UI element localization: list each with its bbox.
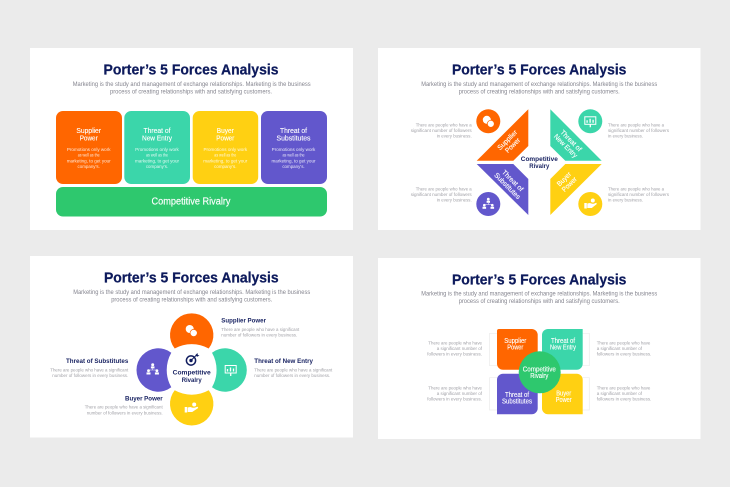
- center circle: competitive rivalry: [519, 351, 561, 393]
- card: buyer power: Promotions only work: [203, 147, 248, 152]
- card: threat of substitutes: company’s.: [282, 164, 305, 169]
- card: supplier power: Supplier: [76, 128, 102, 135]
- quadrant: threat of substitutes: Substitutes: [502, 399, 532, 406]
- title: Porter’s 5 Forces Analysis: [452, 272, 626, 288]
- subtitle: Marketing is the study and management of exchange relationships. Marketing is the business: [421, 290, 657, 297]
- quadrant: threat of substitutes: Threat of: [505, 392, 529, 399]
- center label: [173, 370, 211, 384]
- text: substitutes description: followers in every business.: [427, 397, 482, 402]
- subtitle: process of creating relationships with and satisfying customers.: [111, 296, 272, 303]
- text: supplier power description: There are people who have: [428, 340, 482, 345]
- subtitle: process of creating relationships with and satisfying customers.: [459, 298, 620, 305]
- triangle: supplier power: [477, 109, 528, 161]
- triangle: threat of new entry: Threat of: [558, 129, 582, 153]
- text: supplier power description: [427, 340, 483, 357]
- text: threat of new entry: number of followers in every business.: [254, 373, 330, 378]
- quadrant: supplier power: Supplier: [504, 338, 527, 345]
- triangle: threat of substitutes: [477, 164, 528, 215]
- icon: target: [186, 353, 200, 365]
- text: supplier power description: There are people who have a: [416, 122, 472, 128]
- text: supplier power: [221, 317, 300, 338]
- quadrant: threat of new entry: New Entry: [550, 345, 576, 352]
- card: threat of substitutes: Promotions only work: [272, 147, 316, 152]
- text: new entry description: followers in every business.: [597, 352, 651, 357]
- text: substitutes description: significant number of followers: [411, 192, 472, 197]
- card: threat of new entry: company’s.: [146, 164, 168, 169]
- panel: card layout slide: [30, 48, 353, 230]
- text: new entry description: There are people who have a: [608, 122, 664, 128]
- text: threat of new entry: There are people who have a significant: [254, 367, 333, 372]
- text: new entry description: significant number of followers: [608, 128, 670, 133]
- text: supplier power: number of followers in every business.: [221, 333, 297, 338]
- center label: Rivalry: [182, 377, 202, 384]
- text: supplier power description: a significant number of: [437, 346, 483, 351]
- title: Porter’s 5 Forces Analysis: [104, 271, 279, 287]
- card: threat of substitutes: [261, 111, 327, 184]
- center label: Competitive: [173, 370, 211, 377]
- center label: Rivalry: [529, 163, 550, 170]
- triangle: buyer power: Power: [561, 176, 579, 194]
- text: buyer description: [597, 385, 651, 402]
- text: new entry description: There are people who have: [597, 340, 651, 345]
- petal: buyer power: [170, 390, 213, 425]
- text: buyer power: [85, 395, 163, 415]
- icon: presentation board: [578, 109, 602, 133]
- card: buyer power: marketing, to get your: [203, 158, 248, 163]
- text: threat of substitutes: [50, 358, 129, 378]
- card: threat of new entry: Threat of: [144, 128, 171, 135]
- subtitle: [73, 289, 310, 303]
- triangle: threat of substitutes: Threat of: [500, 169, 524, 193]
- panel: petal layout slide: [30, 256, 353, 438]
- quadrant: buyer power: [542, 374, 583, 414]
- card: supplier power: company’s.: [78, 164, 100, 169]
- quadrant: threat of new entry: Threat of: [551, 338, 575, 345]
- text: threat of substitutes: number of followers in every business.: [52, 373, 128, 378]
- card: supplier power: marketing, to get your: [67, 158, 111, 163]
- quadrant: supplier power: Power: [507, 345, 524, 352]
- text: threat of new entry: Threat of New Entry: [254, 358, 313, 365]
- text: supplier power description: followers in every business.: [427, 352, 482, 357]
- card: buyer power: as well as the: [214, 153, 237, 158]
- icon: coins: [476, 109, 500, 133]
- card: buyer power: Power: [216, 135, 235, 142]
- text: buyer description: [608, 186, 670, 202]
- bar: competitive rivalry: [56, 187, 327, 216]
- subtitle: process of creating relationships with and satisfying customers.: [459, 89, 620, 96]
- subtitle: [421, 290, 657, 305]
- card: threat of substitutes: as well as the: [282, 153, 305, 158]
- text: buyer description: followers in every business.: [597, 397, 651, 402]
- text: new entry description: a significant number of: [597, 346, 643, 351]
- card: threat of new entry: [124, 111, 190, 184]
- petal: threat of new entry: [212, 348, 247, 392]
- text: new entry description: [608, 122, 670, 138]
- card: supplier power: as well as the: [78, 153, 100, 158]
- text: supplier power: There are people who have a significant: [221, 327, 300, 332]
- subtitle: Marketing is the study and management of exchange relationships. Marketing is the business: [73, 81, 311, 88]
- text: new entry description: in every business.: [608, 134, 643, 138]
- text: buyer description: significant number of followers: [608, 192, 670, 197]
- card: threat of substitutes: Substitutes: [276, 135, 311, 142]
- text: threat of substitutes: Threat of Substitutes: [66, 358, 129, 365]
- text: supplier power description: significant number of followers: [411, 128, 472, 133]
- text: buyer description: in every business.: [608, 198, 643, 202]
- text: threat of substitutes: There are people who have a significant: [50, 367, 129, 372]
- text: substitutes description: There are people who have: [428, 385, 482, 390]
- card: supplier power: [56, 111, 122, 184]
- text: buyer description: a significant number of: [597, 391, 643, 396]
- text: supplier power description: in every business.: [437, 134, 472, 138]
- text: buyer power: There are people who have a significant: [85, 405, 163, 410]
- subtitle: process of creating relationships with and satisfying customers.: [110, 89, 272, 96]
- text: substitutes description: in every business.: [437, 198, 472, 202]
- triangle: threat of new entry: [550, 109, 602, 161]
- text: substitutes description: [411, 186, 472, 202]
- card: threat of new entry: as well as the: [146, 153, 168, 158]
- subtitle: [73, 81, 311, 96]
- card: buyer power: [193, 111, 258, 184]
- bar: competitive rivalry: Competitive Rivalry: [152, 196, 230, 208]
- card: threat of substitutes: marketing, to get your: [272, 158, 316, 163]
- subtitle: Marketing is the study and management of exchange relationships. Marketing is the business: [421, 81, 657, 88]
- text: threat of new entry: [254, 358, 333, 378]
- text: buyer power: Buyer Power: [125, 395, 163, 402]
- petal: threat of substitutes: [137, 348, 171, 392]
- text: substitutes description: a significant number of: [437, 391, 483, 396]
- triangle: threat of new entry: New Entry: [552, 133, 579, 160]
- icon: org chart: [476, 192, 500, 216]
- quadrant: threat of new entry: [542, 329, 583, 370]
- panel: quadrant layout slide: [378, 258, 700, 439]
- quadrant: supplier power: [497, 329, 538, 370]
- card: supplier power: Promotions only work: [67, 147, 111, 152]
- text: supplier power description: [411, 122, 472, 138]
- card: threat of substitutes: Threat of: [280, 128, 307, 135]
- card: buyer power: company’s.: [214, 164, 236, 169]
- triangle: supplier power: Power: [504, 137, 522, 155]
- card: buyer power: Buyer: [217, 128, 234, 135]
- triangle: buyer power: [550, 164, 602, 215]
- center circle: competitive rivalry: Competitive: [523, 367, 556, 374]
- text: substitutes description: There are people who have a: [416, 186, 472, 192]
- text: substitutes description: [427, 385, 483, 402]
- petal: supplier power: [170, 313, 213, 348]
- icon: hand with coin: [578, 192, 602, 216]
- card: threat of new entry: Promotions only work: [135, 147, 180, 152]
- subtitle: Marketing is the study and management of exchange relationships. Marketing is the business: [73, 289, 310, 296]
- title: Porter’s 5 Forces Analysis: [452, 63, 626, 79]
- text: new entry description: [597, 340, 651, 357]
- quadrant: threat of substitutes: [497, 374, 538, 414]
- card: threat of new entry: New Entry: [142, 135, 172, 142]
- center label: [521, 156, 558, 170]
- triangle: supplier power: Supplier: [497, 129, 520, 152]
- card: threat of new entry: marketing, to get your: [135, 158, 179, 163]
- text: buyer power: number of followers in every business.: [87, 410, 163, 415]
- triangle: threat of substitutes: Substitutes: [492, 172, 522, 201]
- quadrant: buyer power: Power: [556, 397, 572, 404]
- card: supplier power: Power: [80, 135, 98, 142]
- quadrant: buyer power: Buyer: [556, 391, 572, 398]
- panel: triangle layout slide: [378, 48, 700, 230]
- center label: Competitive: [521, 156, 558, 163]
- triangle: buyer power: Buyer: [556, 171, 573, 188]
- text: supplier power: Supplier Power: [221, 317, 266, 324]
- text: buyer description: There are people who have: [597, 385, 651, 390]
- subtitle: [421, 81, 657, 96]
- title: Porter’s 5 Forces Analysis: [104, 63, 278, 79]
- center circle: competitive rivalry: Rivalry: [530, 373, 549, 380]
- text: buyer description: There are people who have a: [608, 186, 664, 192]
